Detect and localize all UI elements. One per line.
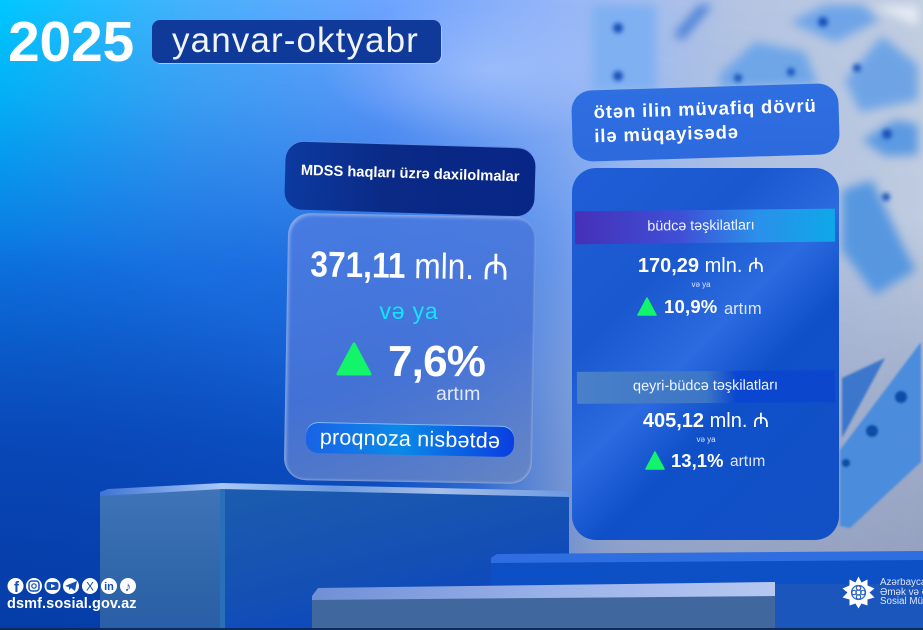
pill: forecast bbox=[306, 423, 514, 457]
comparison text: ötən ilin müvafiq dövrü bbox=[593, 95, 817, 122]
podium: left bbox=[100, 483, 569, 630]
amount: budget: 170,29 mln. ₼ bbox=[638, 255, 764, 277]
panel: main value bbox=[284, 213, 536, 484]
year heading: 2025 bbox=[8, 10, 134, 74]
website: dsmf.sosial.gov.az bbox=[7, 596, 137, 612]
pill text: proqnoza nisbətdə bbox=[320, 425, 500, 453]
panel header: comparison bbox=[571, 83, 840, 162]
growth label: artım bbox=[436, 383, 480, 405]
period badge bbox=[152, 20, 441, 63]
icon: up triangle bbox=[336, 342, 372, 376]
main percent: 7,6% bbox=[388, 337, 485, 386]
amount: non-budget: 405,12 mln. ₼ bbox=[643, 410, 769, 432]
icon: up triangle bbox=[637, 297, 657, 316]
panel: comparison values bbox=[572, 168, 839, 540]
percent: non-budget: 13,1% bbox=[671, 450, 723, 471]
growth label: artım bbox=[730, 453, 765, 470]
social icons: X bbox=[86, 580, 94, 594]
blurred star blocks right bbox=[592, 5, 918, 295]
podium: right lower bbox=[312, 551, 923, 630]
main amount: 371,11 mln. ₼ bbox=[310, 243, 509, 288]
band: budget organisations bbox=[575, 209, 835, 244]
percent: budget: 10,9% bbox=[664, 296, 717, 317]
icon: up triangle bbox=[645, 451, 665, 470]
band text: qeyri-büdcə təşkilatları bbox=[633, 377, 778, 395]
growth label: artım bbox=[724, 300, 762, 318]
band text: büdcə təşkilatları bbox=[647, 217, 755, 235]
connector text: və ya bbox=[380, 298, 438, 324]
logo text bbox=[880, 578, 923, 606]
header text: MDSS haqları üzrə daxilolmalar bbox=[301, 163, 520, 185]
social icons bbox=[8, 578, 136, 595]
period text: yanvar-oktyabr bbox=[172, 21, 419, 60]
connector text: və ya bbox=[696, 435, 716, 444]
comparison text: ilə müqayisədə bbox=[594, 121, 739, 146]
connector text: və ya bbox=[691, 280, 711, 289]
band: non-budget organisations bbox=[577, 370, 835, 404]
panel header: MDSS bbox=[284, 141, 536, 217]
social icons: in bbox=[104, 581, 114, 593]
comparison text bbox=[593, 95, 817, 146]
social icons: ♪ bbox=[125, 579, 131, 594]
logo star bbox=[842, 576, 874, 608]
